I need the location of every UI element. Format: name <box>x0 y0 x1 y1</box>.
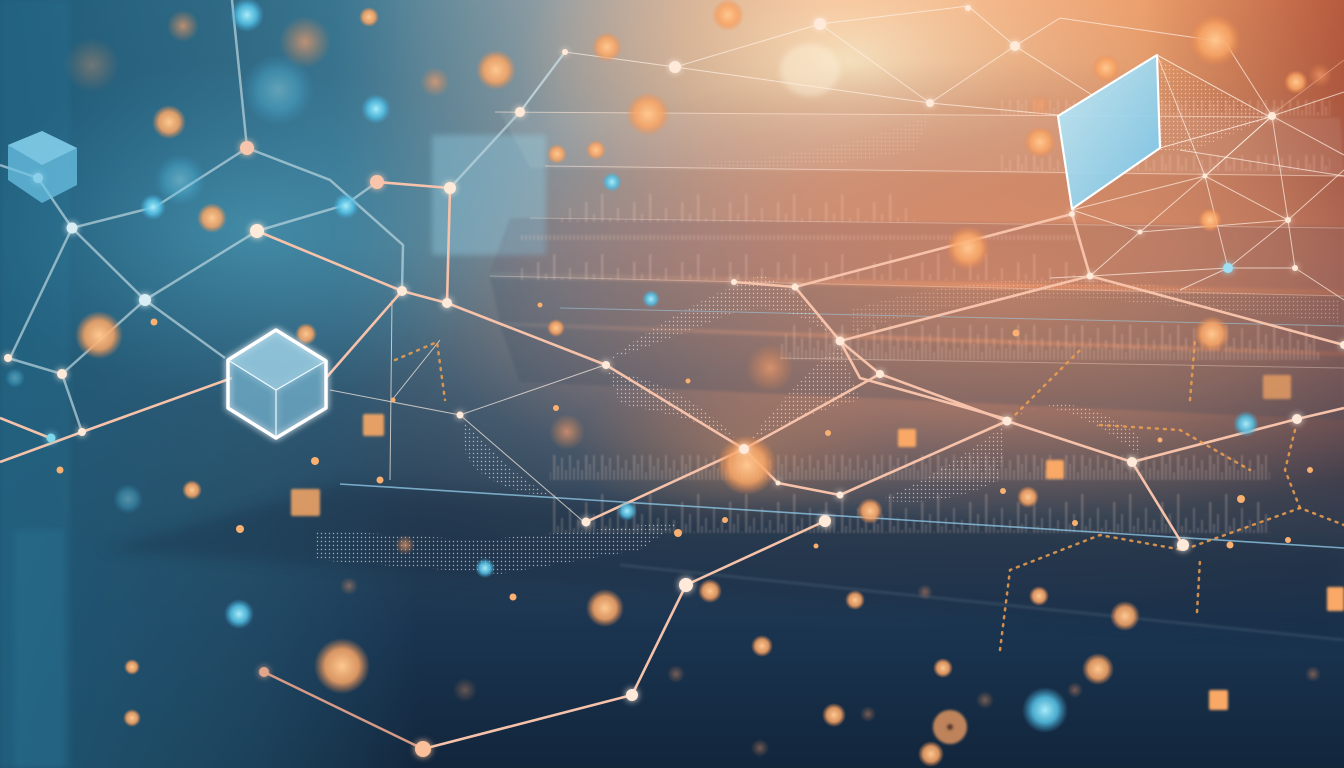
icon: large translucent prism top right <box>1058 55 1270 209</box>
icon: glowing wireframe cube <box>228 330 326 438</box>
tiny orange sparks <box>56 302 1313 600</box>
background fine mesh upper right <box>330 6 1344 522</box>
ring light <box>933 710 967 744</box>
network lines: left pale blue <box>0 0 565 432</box>
dotted orange connectors <box>395 340 1344 650</box>
icon: translucent cube top left <box>8 131 77 203</box>
data slats with bar charts <box>100 100 1344 640</box>
dotted ribbons <box>316 60 1340 574</box>
square glowing lights <box>291 375 1344 710</box>
blurred translucent panel <box>432 135 546 255</box>
